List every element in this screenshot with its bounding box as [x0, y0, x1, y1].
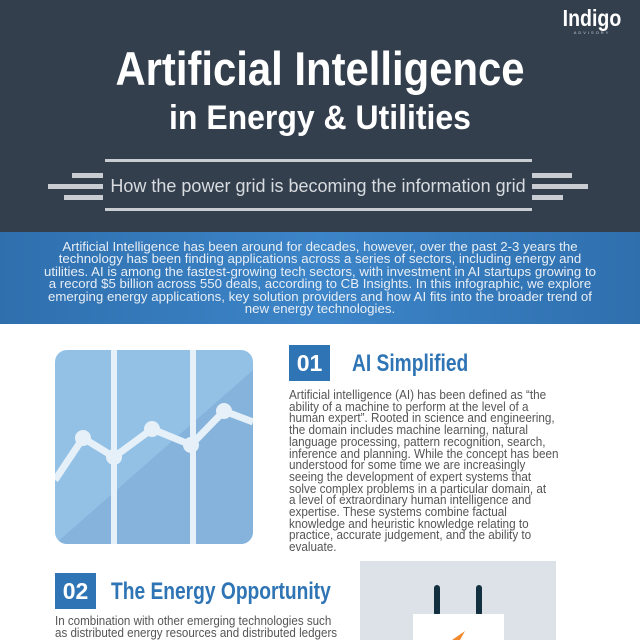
logo: Indigo	[563, 5, 621, 31]
intro band: utilities. AI is among the fastest-growing tech sectors, with investment in AI startups growing to	[44, 264, 596, 279]
header panel	[0, 0, 640, 232]
text: AI simplified body: ability of a machine to perform at the level of a	[289, 400, 529, 414]
intro band: new energy technologies.	[245, 301, 395, 316]
text: AI simplified body: Artificial intelligence (AI) has been defined as “the	[289, 388, 546, 402]
text: AI simplified body: understood for some time we are increasingly	[289, 458, 525, 472]
text: AI simplified body: evaluate.	[289, 540, 337, 554]
text: AI simplified body: language processing, pattern recognition, search,	[289, 435, 546, 449]
text: energy opportunity body: as distributed energy resources and distributed ledgers	[55, 626, 337, 640]
heading: 01 AI Simplified: 01	[297, 350, 322, 376]
text: energy opportunity body: In combination with other emerging technologies such	[55, 614, 331, 628]
heading: 02 The Energy Opportunity	[55, 573, 331, 609]
text: AI simplified body: knowledge and heuristic knowledge relating to	[289, 517, 529, 531]
intro band: emerging energy applications, key solution providers and how AI fits into the broader trend of	[48, 289, 592, 304]
intro band	[0, 232, 640, 324]
title: in Energy & Utilities	[169, 99, 471, 137]
text: AI simplified body: human expert”. Rooted in science and engineering,	[289, 411, 555, 425]
heading: 01 AI Simplified: AI Simplified	[352, 350, 468, 377]
heading: 01 AI Simplified	[289, 345, 468, 381]
heading: 02 The Energy Opportunity: 02	[63, 578, 88, 604]
logo: ADVISORY	[574, 30, 610, 35]
text: AI simplified body: a level of extraordinary human intelligence and	[289, 493, 531, 507]
text: AI simplified body: the domain includes machine learning, natural	[289, 423, 528, 437]
text: AI simplified body: seeing the development of expert systems that	[289, 470, 531, 484]
text: AI simplified body: practice, accurate judgement, and the ability to	[289, 528, 531, 542]
text: AI simplified body: inference and planning. While the concept has been	[289, 447, 559, 461]
heading: 02 The Energy Opportunity: The Energy Opportunity	[111, 578, 331, 605]
text: AI simplified body	[289, 388, 559, 554]
intro band: Artificial Intelligence has been around for decades, however, over the past 2-3 years the	[62, 239, 578, 254]
subtitle with grid lines	[48, 159, 588, 211]
text: AI simplified body: solve complex problems in a particular domain, at	[289, 482, 546, 496]
text: energy opportunity body	[55, 614, 337, 640]
title: Artificial Intelligence	[115, 42, 525, 95]
icon: line chart	[55, 350, 253, 544]
text: AI simplified body: expertise. These systems combine factual	[289, 505, 507, 519]
subtitle with grid lines: How the power grid is becoming the information grid	[110, 176, 526, 196]
intro band: technology has been finding applications across a series of sectors, including energy and	[59, 251, 581, 266]
icon: plug panel	[360, 561, 556, 640]
intro band: a record $5 billion across 550 deals, according to CB Insights. In this infographic, we explore	[49, 276, 591, 291]
title	[115, 42, 525, 137]
